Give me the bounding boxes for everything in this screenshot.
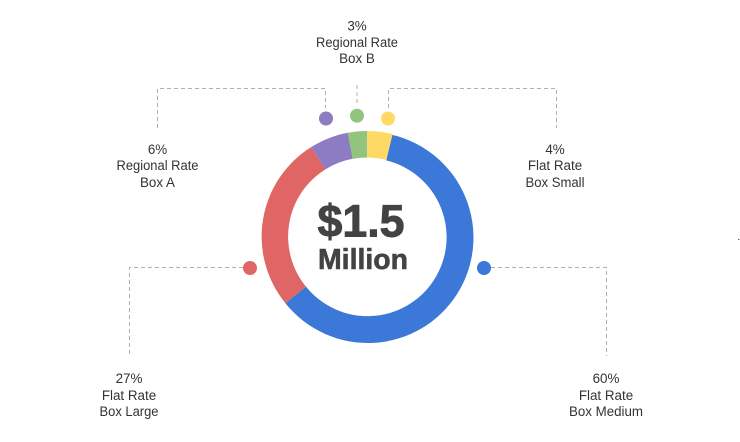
callout: Regional Rate Box B: Box B bbox=[339, 51, 375, 66]
callout: Flat Rate Box Medium: 60% bbox=[593, 371, 619, 386]
callout: Flat Rate Box Large: 27% bbox=[116, 371, 142, 386]
callout: Flat Rate Box Medium: Box Medium bbox=[569, 404, 643, 419]
segment: Flat Rate Box Small 4% bbox=[367, 131, 393, 160]
callout: Flat Rate Box Medium bbox=[477, 261, 643, 419]
callout: Regional Rate Box B: Regional Rate bbox=[316, 35, 398, 50]
segment: Flat Rate Box Medium 60% bbox=[285, 135, 473, 343]
callout: Flat Rate Box Medium: Flat Rate bbox=[579, 388, 633, 403]
callout: Flat Rate Box Large: Flat Rate bbox=[102, 388, 156, 403]
callout: Flat Rate Box Small: Flat Rate bbox=[528, 158, 582, 173]
callout: Flat Rate Box Large: Box Large bbox=[100, 404, 158, 419]
callout: Regional Rate Box A: 6% bbox=[148, 142, 167, 157]
callout: Flat Rate Box Small bbox=[381, 88, 585, 190]
donut chart bbox=[262, 131, 473, 343]
callout: Regional Rate Box B: 3% bbox=[347, 18, 367, 34]
callout: Flat Rate Box Large bbox=[100, 261, 257, 419]
segment: Regional Rate Box B 3% bbox=[348, 131, 367, 159]
callout: Regional Rate Box A: Regional Rate bbox=[116, 158, 198, 173]
segment: Regional Rate Box A 6% bbox=[311, 133, 353, 170]
center total bbox=[318, 196, 408, 276]
callout: Regional Rate Box B bbox=[316, 18, 398, 123]
callout: Regional Rate Box A bbox=[116, 88, 333, 190]
callout: Flat Rate Box Small: 4% bbox=[545, 142, 565, 157]
callout: Regional Rate Box A: Box A bbox=[140, 175, 175, 190]
total unit: Million bbox=[318, 244, 408, 276]
total amount: $1.5 bbox=[318, 196, 404, 247]
callout: Flat Rate Box Small: Box Small bbox=[526, 175, 585, 190]
segment: Flat Rate Box Large 27% bbox=[262, 147, 325, 303]
